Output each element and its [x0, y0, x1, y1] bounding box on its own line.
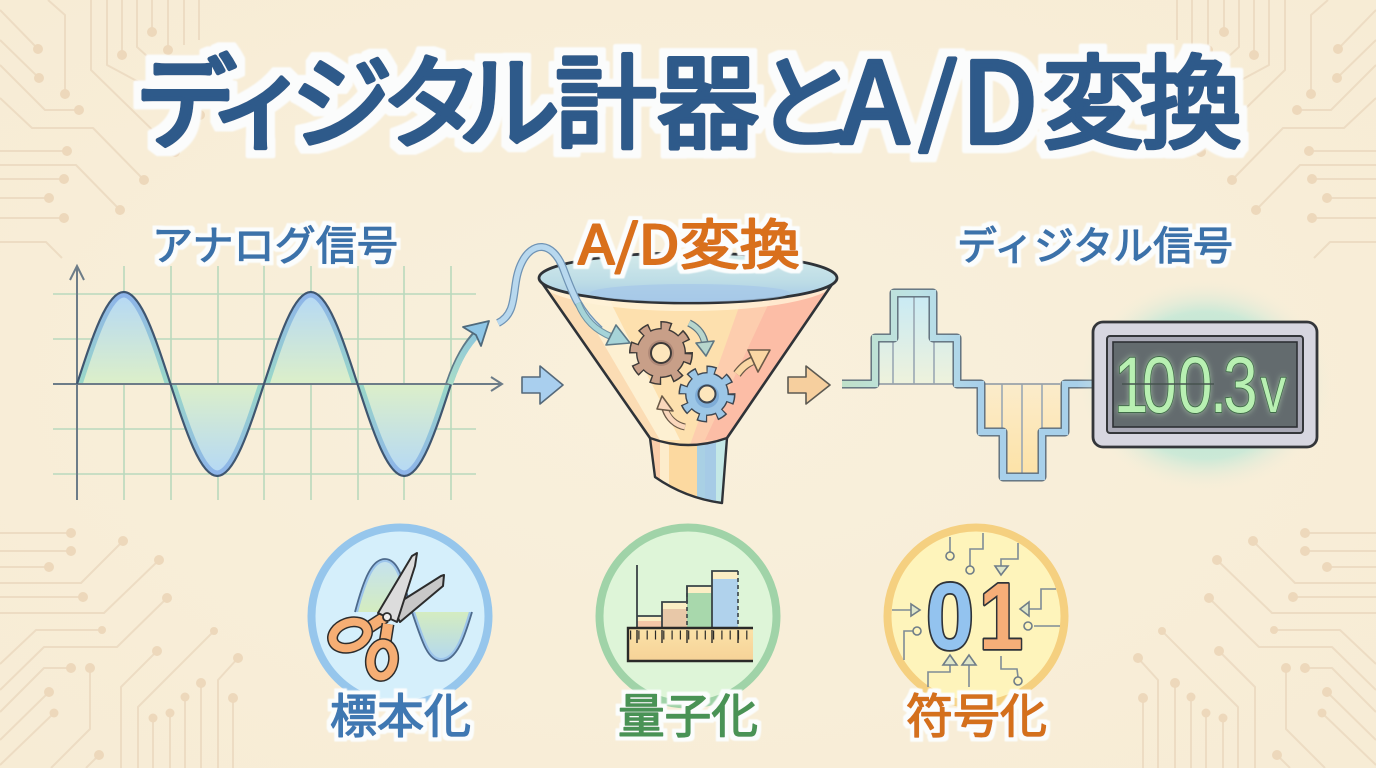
funnel with gears — [498, 247, 837, 510]
digit 1: 1 — [979, 564, 1023, 670]
brown gear — [635, 327, 687, 379]
rising arrow tail — [449, 332, 478, 384]
quantization icon — [600, 528, 776, 704]
circuit pattern: bottom right — [1133, 528, 1376, 768]
axes — [53, 266, 502, 500]
cone body — [540, 280, 835, 445]
curved arrow: right of brown gear — [689, 323, 714, 356]
circuit traces — [892, 533, 1060, 687]
title: D — [961, 14, 1038, 176]
circuit pattern: top right — [1171, 0, 1376, 258]
ribbon entering funnel — [498, 247, 600, 330]
funnel rim and water — [540, 280, 835, 438]
scissors — [329, 553, 444, 678]
curved arrow: orange up-right — [737, 350, 770, 374]
chart: analog sine wave — [53, 266, 502, 500]
sine inner band — [77, 292, 451, 476]
heading: analog signal: アナログ信号 — [152, 212, 398, 272]
digit 0: 0 — [926, 564, 974, 670]
arrow: analog to funnel — [522, 366, 563, 404]
meter reading: v — [1261, 354, 1286, 426]
step bars — [637, 617, 662, 628]
sine area fill — [77, 292, 451, 476]
grid — [53, 266, 476, 500]
title: ディジタル計器と — [135, 23, 857, 170]
chart: digital staircase signal — [842, 293, 1095, 477]
title: A — [841, 14, 909, 176]
sample lines — [893, 293, 1042, 477]
meter reading: 100.3 — [1114, 342, 1258, 430]
circuit pattern: top left — [0, 0, 205, 258]
ruler — [628, 628, 753, 661]
heading: A/D conversion: A/D変換 — [578, 201, 800, 280]
circuit pattern: bottom left — [0, 528, 243, 768]
bottom fill — [981, 384, 1065, 477]
heading: digital signal: ディジタル信号 — [957, 215, 1233, 272]
encoding icon — [888, 528, 1064, 704]
label: sampling: 標本化 — [330, 678, 471, 747]
sampling icon — [312, 528, 488, 704]
label: quantization: 量子化 — [618, 678, 758, 747]
top fill — [872, 293, 957, 384]
blue gear — [684, 371, 730, 417]
spout — [650, 438, 727, 503]
stair outline — [842, 293, 1095, 477]
digital meter — [1093, 322, 1317, 447]
meter glow — [1077, 277, 1333, 493]
curved arrow: lower left — [657, 396, 685, 427]
mini sine wave — [355, 559, 472, 661]
label: encoding: 符号化 — [906, 678, 1047, 747]
arrow: funnel to digital — [788, 366, 830, 404]
title: 変換 — [1042, 23, 1242, 170]
title: / — [919, 24, 957, 163]
sine line — [77, 292, 451, 476]
